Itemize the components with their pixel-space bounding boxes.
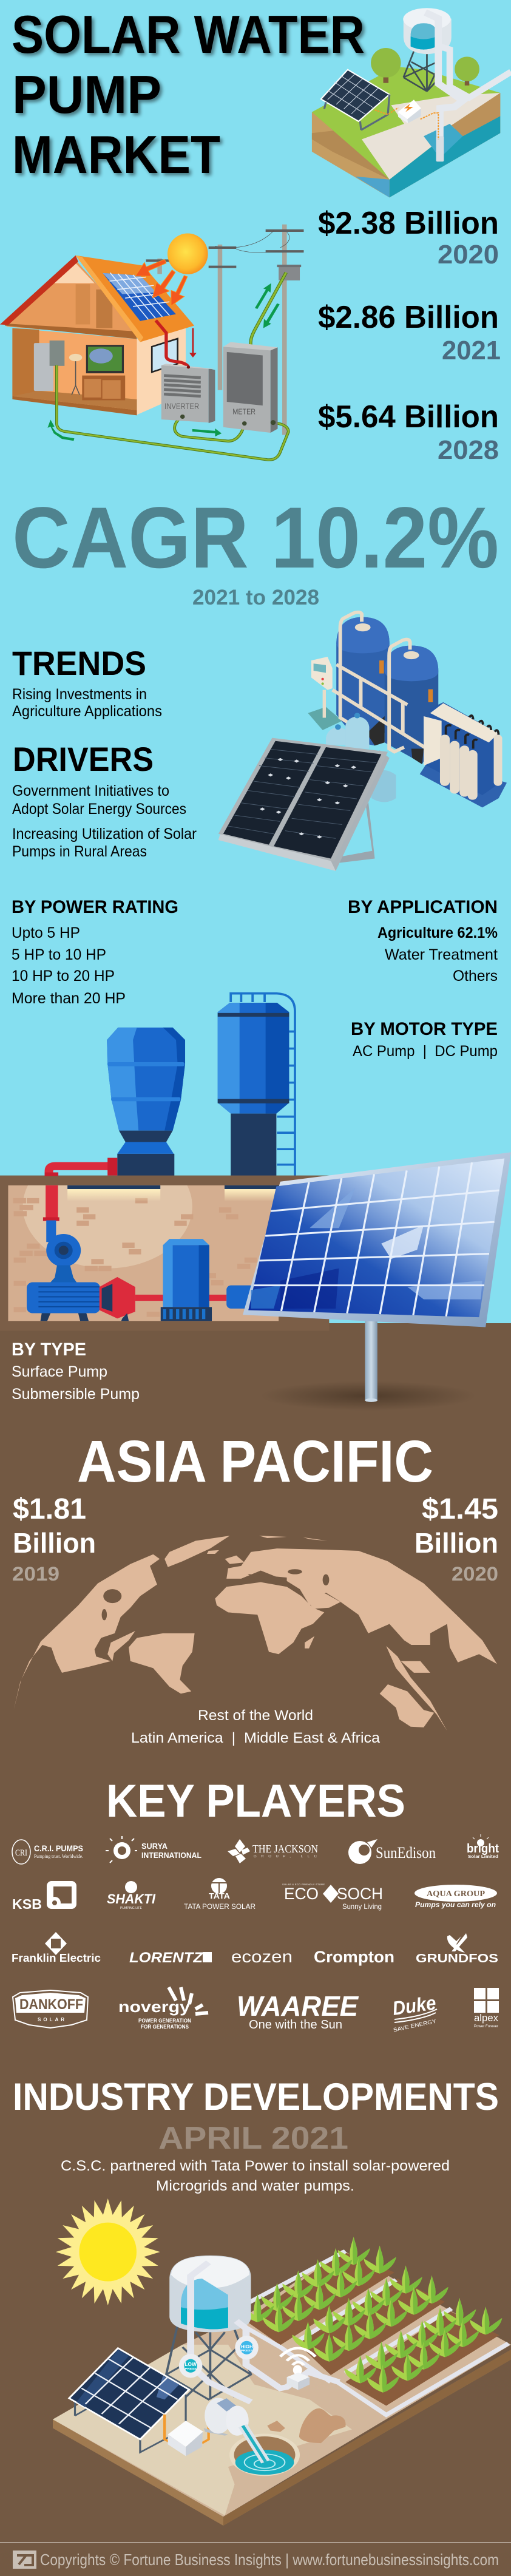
logo: SunEdison — [348, 1839, 436, 1864]
wifi sensor — [280, 2348, 316, 2390]
logo: Eco Soch: Sunny Living — [342, 1902, 382, 1911]
surface pump — [27, 1221, 135, 1321]
logo: Alpex: Power Forever — [474, 2025, 498, 2029]
logo: Bright Solar: bright — [467, 1842, 499, 1856]
title — [12, 4, 365, 185]
right tank with ladder — [218, 994, 295, 1176]
illustration: solar well island — [312, 8, 511, 197]
market values — [318, 206, 501, 465]
segment: by power rating: BY POWER RATING — [12, 897, 178, 917]
solar panel — [218, 738, 390, 871]
logo: Shakti — [107, 1881, 156, 1910]
well with water — [229, 2425, 300, 2476]
logo: Tata Power Solar: TATA — [209, 1891, 231, 1900]
drivers text: Government Initiatives to — [12, 782, 169, 799]
segment: by power rating: 10 HP to 20 HP — [12, 968, 115, 985]
logo: Surya International: INTERNATIONAL — [141, 1851, 201, 1860]
segment: by power rating: More than 20 HP — [12, 990, 126, 1007]
high pressure gauge — [235, 2336, 259, 2359]
rest of the world: Latin America | Middle East & Africa — [131, 1730, 381, 1746]
logo: The Jackson Group: THE JACKSON — [252, 1843, 318, 1855]
logo: Tata Power Solar: TATA POWER SOLAR — [184, 1902, 256, 1911]
reverse osmosis unit — [420, 702, 507, 807]
logo: CRI Pumps: C.R.I. PUMPS — [34, 1843, 83, 1853]
segment: by type — [12, 1340, 140, 1403]
market values: $2.86 Billion — [318, 300, 499, 335]
logo: Crompton: Crompton — [314, 1948, 394, 1966]
high pressure gauge: PRESS — [241, 2350, 253, 2353]
logo: Shakti: SHAKTI — [107, 1891, 156, 1907]
low pressure gauge: PRESS — [184, 2367, 197, 2371]
segment: by motor type: AC Pump | DC Pump — [353, 1043, 498, 1060]
logo: Aqua Group: Pumps you can rely on — [415, 1900, 496, 1909]
refrigerator — [34, 343, 53, 391]
illustration: water treatment plant and solar panel — [218, 612, 507, 871]
segment: by power rating — [12, 897, 178, 1007]
footer — [13, 2551, 499, 2569]
logo: Aqua Group — [415, 1885, 497, 1909]
logo: Bright Solar: Solar Limited — [468, 1855, 498, 1859]
roof solar panel — [103, 273, 176, 321]
television — [86, 345, 124, 373]
illustration: pump station with solar panel — [0, 994, 511, 1411]
background: sky — [0, 0, 511, 1324]
logo: Franklin Electric: Franklin Electric — [12, 1952, 101, 1964]
logo: CRI Pumps — [12, 1840, 83, 1864]
illustration: solar irrigation farm — [53, 2198, 511, 2526]
trees — [371, 48, 479, 86]
logo: Ecozen: ecozen — [231, 1947, 293, 1966]
segment: by application: Others — [453, 968, 498, 985]
market values: 2021 — [442, 336, 501, 365]
water tank — [169, 2256, 251, 2332]
Asia Pacific value 2020: 2020 — [452, 1563, 498, 1585]
flow arrows — [47, 283, 280, 441]
trends heading: TRENDS — [12, 644, 146, 682]
inverter: INVERTER — [164, 402, 199, 412]
Asia Pacific value 2019: $1.81 — [13, 1493, 86, 1525]
Asia Pacific value 2020 — [415, 1493, 498, 1585]
segment: by application — [348, 897, 498, 985]
segment: by power rating: 5 HP to 10 HP — [12, 946, 106, 963]
logo: Aqua Group: AQUA GROUP — [427, 1890, 485, 1899]
high pressure gauge: HIGH — [241, 2344, 253, 2349]
Asia Pacific value 2020: $1.45 — [422, 1493, 498, 1525]
segment: by type: Submersible Pump — [12, 1386, 140, 1403]
logo: Surya International — [106, 1836, 201, 1863]
segment: by type: BY TYPE — [12, 1340, 86, 1360]
logo: Franklin Electric — [12, 1932, 101, 1964]
solar panel — [243, 1152, 511, 1327]
logo: KSB: KSB — [12, 1896, 42, 1912]
footer divider — [0, 2542, 511, 2543]
meter: METER — [232, 407, 256, 416]
logo: KSB — [12, 1881, 76, 1912]
logo: CRI Pumps: CRI — [15, 1848, 27, 1858]
distribution pipes — [191, 2262, 339, 2402]
drivers text: Pumps in Rural Areas — [12, 843, 147, 860]
market values: 2020 — [438, 240, 499, 269]
trends text: Agriculture Applications — [12, 703, 162, 720]
inverter box — [375, 100, 438, 140]
left tank — [107, 1028, 185, 1176]
logo: Alpex: alpex — [474, 2012, 498, 2024]
logo: Dankoff Solar — [13, 1990, 88, 2028]
logo: Waaree: WAAREE — [237, 1990, 359, 2022]
drivers heading: DRIVERS — [13, 740, 154, 778]
logo: Grundfos — [416, 1933, 498, 1965]
pump motor — [164, 2398, 249, 2443]
segment: by motor type — [351, 1019, 498, 1060]
logo: Surya International: SURYA — [141, 1842, 168, 1851]
utility poles — [146, 225, 303, 435]
ground slab — [53, 2250, 511, 2526]
logo: The Jackson Group: GROUP, LLC — [254, 1855, 317, 1859]
drivers text: Increasing Utilization of Solar — [12, 825, 197, 842]
water tower — [403, 8, 511, 161]
segment: by power rating: Upto 5 HP — [12, 924, 80, 941]
market values: $2.38 Billion — [318, 206, 499, 241]
logo: Waaree: One with the Sun — [249, 2018, 342, 2032]
logo: Dankoff Solar: SOLAR — [38, 2017, 64, 2022]
basement wall — [0, 1175, 329, 1323]
Asia Pacific value 2020: Billion — [415, 1527, 498, 1559]
logo: Duke: SAVE ENERGY — [393, 2018, 437, 2033]
title: MARKET — [12, 124, 220, 185]
segment: by type: Surface Pump — [12, 1363, 107, 1380]
logo: Bright Solar — [467, 1834, 499, 1859]
sun — [168, 234, 208, 274]
logo: Eco Soch: SOLAR & ECO FRIENDLY STORE — [282, 1883, 325, 1886]
rocks — [267, 2408, 346, 2443]
logo: Alpex — [474, 1988, 499, 2029]
logo: Duke — [391, 1991, 438, 2033]
pipes — [333, 612, 427, 752]
trends text: Rising Investments in — [12, 686, 147, 703]
development description: Microgrids and water pumps. — [156, 2178, 354, 2194]
tanks — [336, 617, 438, 764]
water bottles — [326, 713, 396, 802]
market values: 2028 — [438, 435, 499, 465]
Asia Pacific heading: ASIA PACIFIC — [77, 1428, 433, 1494]
Asia Pacific value 2019: Billion — [13, 1527, 96, 1559]
blue filter vessel — [161, 1239, 254, 1321]
segment: by motor type: BY MOTOR TYPE — [351, 1019, 498, 1039]
logo: Novergy — [118, 1987, 208, 2030]
rest of the world — [131, 1707, 381, 1746]
solar panel post — [261, 1321, 476, 1411]
low pressure gauge: LOW — [184, 2362, 197, 2367]
segment: by application: Agriculture 62.1% — [377, 924, 498, 941]
CAGR period: 2021 to 2028 — [192, 586, 319, 609]
logo: Eco Soch: ECO — [284, 1885, 319, 1903]
window — [152, 339, 178, 372]
red pipes — [43, 1158, 226, 1301]
sun — [56, 2198, 160, 2305]
logo: Lorentz: LORENTZ — [129, 1950, 203, 1966]
logo: Dankoff Solar: DANKOFF — [19, 1996, 83, 2013]
development date: APRIL 2021 — [158, 2121, 348, 2156]
trends text — [12, 686, 162, 720]
background: brown ground — [0, 1323, 511, 2576]
controller box — [168, 2421, 204, 2456]
segment: by application: Water Treatment — [385, 946, 498, 963]
inverter — [161, 364, 215, 423]
house — [0, 256, 194, 415]
tower frame — [166, 2325, 251, 2399]
Asia Pacific value 2019: 2019 — [12, 1563, 59, 1585]
Asia Pacific value 2019 — [12, 1493, 96, 1585]
logo: Novergy: POWER GENERATION — [138, 2018, 191, 2024]
logo: Eco Soch — [282, 1883, 383, 1911]
cables — [56, 273, 288, 459]
crop plots — [241, 2237, 509, 2415]
title: SOLAR WATER — [12, 4, 365, 64]
segment: by application: BY APPLICATION — [348, 897, 498, 917]
ground shadow — [308, 707, 342, 730]
cabinet — [82, 376, 125, 400]
lamp — [72, 361, 80, 395]
solar panel — [321, 70, 390, 130]
control panel — [311, 657, 333, 717]
drivers text — [12, 782, 197, 860]
logo: Grundfos: GRUNDFOS — [416, 1952, 498, 1965]
illustration: house with solar roof — [0, 225, 303, 459]
development description: C.S.C. partnered with Tata Power to install solar-powered — [61, 2158, 450, 2174]
key players heading: KEY PLAYERS — [106, 1775, 405, 1827]
market values: $5.64 Billion — [318, 399, 499, 435]
logo: Tata Power Solar — [184, 1878, 256, 1911]
rest of the world: Rest of the World — [198, 1707, 313, 1724]
low pressure gauge — [179, 2354, 202, 2378]
logo: Novergy: FOR GENERATIONS — [141, 2024, 189, 2030]
drivers text: Adopt Solar Energy Sources — [12, 801, 186, 818]
development description — [61, 2158, 450, 2194]
logo: The Jackson Group — [228, 1839, 318, 1863]
logo: Duke: Duke — [391, 1991, 438, 2019]
logo: CRI Pumps: Pumping trust. Worldwide. — [34, 1854, 83, 1859]
world map — [14, 1536, 497, 1731]
title: PUMP — [12, 64, 161, 124]
logo: SunEdison: SunEdison — [376, 1844, 436, 1862]
logo: Novergy: novergy — [118, 1998, 191, 2016]
footer logo — [13, 2551, 36, 2569]
solar array — [69, 2348, 189, 2452]
logo: Eco Soch: SOCH — [337, 1885, 383, 1903]
sun ray arrows — [135, 259, 188, 306]
logo: Shakti: PUMPING LIFE — [120, 1907, 143, 1910]
key player logos — [12, 1834, 499, 2033]
meter — [223, 342, 278, 433]
